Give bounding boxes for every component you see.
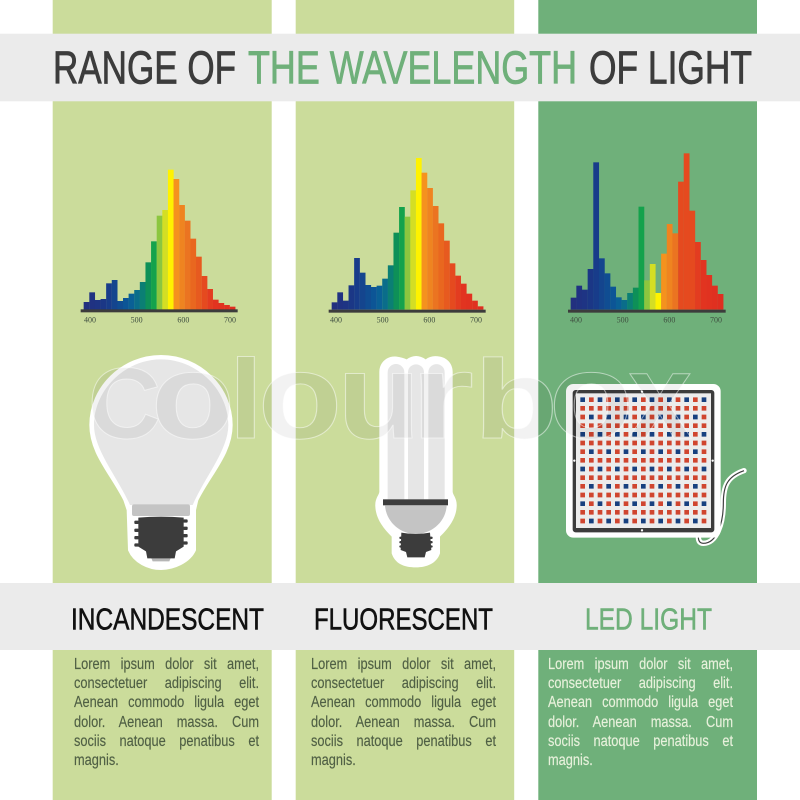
label: incandescent: INCANDESCENT [71,601,264,636]
title: OF LIGHT [589,41,752,93]
text block: incandescent description [74,656,259,769]
bar chart: fluorescent spectrum: 700 [470,315,482,324]
title: RANGE OF [53,41,236,93]
text block: fluorescent description: sociis natoque penatibus et [311,733,496,750]
watermark: x [628,328,692,464]
icon: LED panel [566,384,744,543]
watermark: r [410,328,474,464]
watermark: o [258,328,342,464]
watermark: u [337,328,421,464]
watermark [88,328,692,464]
text block: fluorescent description [311,656,496,769]
text block: LED description: Aenean commodo ligula eget [548,694,733,711]
label: fluorescent: FLUORESCENT [314,601,493,636]
bar chart: incandescent spectrum [81,170,238,324]
text block: fluorescent description: consectetuer adipiscing elit. [311,675,496,692]
icon: incandescent bulb [91,356,231,569]
text block: incandescent description: Aenean commodo ligula eget [74,694,259,711]
bar chart: fluorescent spectrum: 500 [377,315,389,324]
panel: LED column [538,0,757,800]
text block: LED description: Lorem ipsum dolor sit amet, [548,656,733,673]
bar chart: incandescent spectrum: 400 [84,315,96,324]
text block: incandescent description: consectetuer adipiscing elit. [74,675,259,692]
title: THE WAVELENGTH [248,41,577,93]
text block: LED description: dolor. Aenean massa. Cum [548,714,733,730]
text block: fluorescent description: dolor. Aenean massa. Cum [311,714,496,730]
text block: incandescent description: sociis natoque penatibus et [74,733,259,750]
bar chart: incandescent spectrum: 500 [131,315,143,324]
bar chart: fluorescent spectrum: 400 [330,315,342,324]
panel: incandescent column [53,0,272,800]
text block: incandescent description: Lorem ipsum dolor sit amet, [74,656,259,673]
panel: fluorescent column [296,0,514,800]
text block: fluorescent description: Lorem ipsum dolor sit amet, [311,656,496,673]
bar chart: fluorescent spectrum [329,158,486,324]
text block: incandescent description: dolor. Aenean massa. Cum [74,714,259,730]
watermark: C [88,348,161,460]
text block: incandescent description: magnis. [74,752,119,769]
bar chart: LED spectrum: 400 [570,315,582,324]
watermark: o [549,328,633,464]
title band [0,34,800,101]
text block: fluorescent description: magnis. [311,752,356,769]
text block: LED description [548,656,734,769]
bar chart: incandescent spectrum: 600 [177,315,189,324]
watermark: b [474,337,558,462]
title [53,41,752,93]
label band [0,583,800,650]
text block: LED description: sociis natoque penatibus et [548,733,733,750]
text block: fluorescent description: Aenean commodo ligula eget [311,694,496,711]
bar chart: LED spectrum [568,153,726,324]
text block: LED description: consectetuer adipiscing elit. [548,675,733,692]
watermark: o [151,328,235,464]
bar chart: incandescent spectrum: 700 [224,315,236,324]
bar chart: fluorescent spectrum: 600 [423,315,435,324]
watermark: l [229,337,263,462]
bar chart: LED spectrum: 500 [617,315,629,324]
bar chart: LED spectrum: 600 [663,315,675,324]
text block: LED description: magnis. [548,752,593,769]
icon: fluorescent bulb [375,356,457,567]
bar chart: LED spectrum: 700 [710,315,722,324]
label: LED light: LED LIGHT [585,601,712,636]
